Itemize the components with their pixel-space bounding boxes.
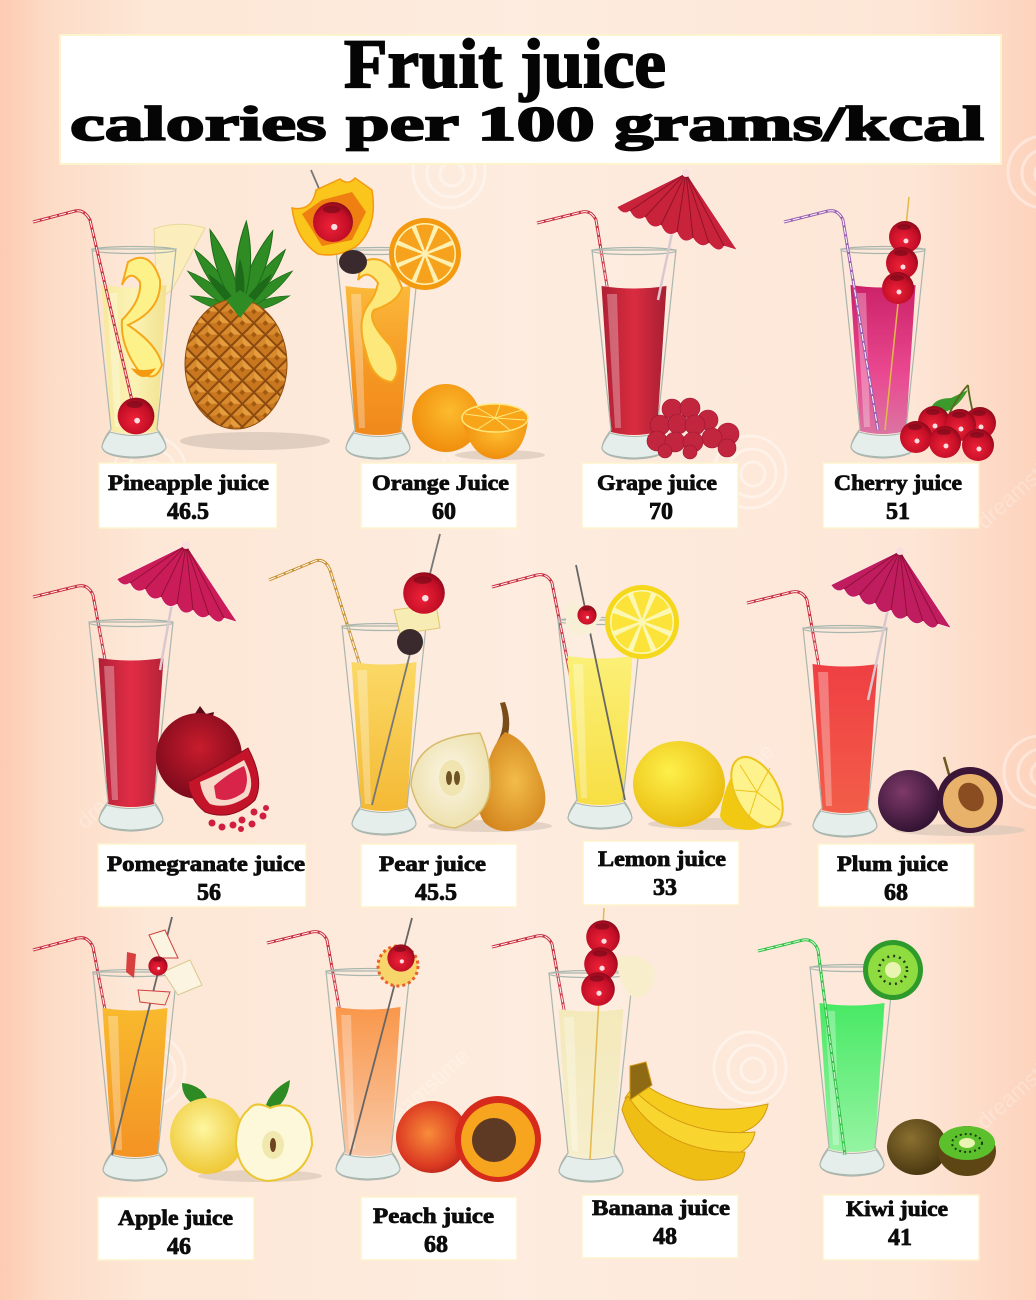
straw <box>492 575 595 800</box>
cherry garnish <box>566 565 625 800</box>
whole pear <box>477 702 545 831</box>
glass <box>89 620 173 831</box>
label: peach juice <box>361 1197 517 1260</box>
whole pomegranate <box>156 706 242 799</box>
label: cherry juice: Cherry juice <box>834 470 962 495</box>
umbrella <box>117 541 237 670</box>
label: pomegranate juice: 56 <box>197 880 221 906</box>
halved kiwi <box>938 1126 996 1176</box>
straw <box>269 560 360 665</box>
cherry skewer <box>350 918 418 1155</box>
halved plum <box>937 757 1003 833</box>
label: pomegranate juice <box>98 844 306 907</box>
umbrella <box>831 547 951 700</box>
label: banana juice: Banana juice <box>592 1195 730 1220</box>
label: orange juice <box>361 463 517 528</box>
drink: peach juice <box>267 918 541 1182</box>
drink: kiwi juice <box>758 940 996 1176</box>
glass <box>558 618 642 829</box>
watermark: dreamstime <box>72 738 174 834</box>
whole kiwi <box>887 1119 947 1175</box>
label: grape juice: Grape juice <box>597 470 717 495</box>
glass <box>592 248 676 459</box>
watermark: dreamstime <box>372 433 474 529</box>
peel spiral <box>122 258 162 376</box>
straw <box>33 211 133 405</box>
label: orange juice: 60 <box>432 499 456 525</box>
label: pineapple juice <box>99 463 277 528</box>
halved orange <box>462 404 528 459</box>
whole orange <box>412 384 480 452</box>
whole peach <box>396 1101 468 1173</box>
straw <box>747 592 820 672</box>
heading: Fruit juice: Fruit juice <box>344 26 666 103</box>
watermark: dreamstime <box>372 1043 474 1139</box>
cherry bunch <box>900 385 996 461</box>
glass <box>841 246 925 458</box>
kiwi slice <box>863 940 923 1000</box>
straw <box>492 936 565 1015</box>
label: apple juice <box>98 1197 254 1260</box>
label: pear juice <box>361 844 517 907</box>
label: grape juice: 70 <box>649 499 673 525</box>
cherries on a pick <box>581 908 655 1160</box>
label: peach juice: Peach juice <box>373 1203 494 1228</box>
drink: grape juice <box>537 169 739 459</box>
cut pomegranate <box>188 748 259 815</box>
label: lemon juice: 33 <box>653 875 677 901</box>
straw <box>784 211 878 430</box>
whole lemon <box>633 741 725 827</box>
drink: lemon juice <box>492 565 793 835</box>
watermark: dreamstime <box>677 738 779 834</box>
straw <box>33 586 106 665</box>
shadow <box>198 1170 322 1182</box>
label: lemon juice: Lemon juice <box>598 846 726 871</box>
drink: banana juice <box>492 908 768 1182</box>
subheading: calories per 100 grams/kcal <box>70 96 984 151</box>
glass <box>810 964 894 1176</box>
label: pear juice: Pear juice <box>379 851 486 876</box>
halved pear <box>411 733 490 828</box>
label: plum juice: Plum juice <box>837 851 948 876</box>
drink: apple juice <box>33 917 322 1182</box>
umbrella <box>617 169 737 300</box>
drink: orange juice <box>292 170 545 460</box>
apple garnish <box>112 917 202 1155</box>
shadow <box>180 432 330 450</box>
label: grape juice <box>582 463 738 528</box>
shadow <box>648 818 792 830</box>
shadow <box>455 450 545 460</box>
pineapple wedge <box>154 224 205 300</box>
label: apple juice: 46 <box>167 1234 191 1260</box>
shadow <box>428 820 552 832</box>
seeds <box>208 805 269 832</box>
label: kiwi juice: Kiwi juice <box>846 1196 948 1221</box>
cherries on a pick <box>882 197 921 430</box>
label: peach juice: 68 <box>424 1232 448 1258</box>
shadow <box>895 824 1025 836</box>
whole plum <box>878 770 940 832</box>
label: cherry juice: 51 <box>886 499 910 525</box>
halved lemon <box>720 749 793 835</box>
pineapple <box>184 221 296 429</box>
glass <box>549 970 633 1182</box>
label: banana juice <box>582 1195 738 1258</box>
cherry <box>118 398 154 434</box>
label: lemon juice <box>583 841 739 905</box>
orange garnish <box>292 170 373 274</box>
straw <box>758 940 845 1155</box>
drink: plum juice <box>747 547 1025 837</box>
orange slice <box>389 218 461 290</box>
drink: cherry juice <box>784 197 996 461</box>
glass <box>93 970 177 1181</box>
label: orange juice: Orange Juice <box>372 470 509 495</box>
label: pineapple juice: Pineapple juice <box>108 470 269 495</box>
glass <box>336 248 420 459</box>
title panel <box>60 26 1001 164</box>
halved peach <box>455 1096 541 1182</box>
label: pear juice: 45.5 <box>415 880 457 906</box>
label: plum juice: 68 <box>884 880 908 906</box>
label: kiwi juice: 41 <box>888 1225 912 1251</box>
glass <box>326 968 410 1180</box>
label: kiwi juice <box>823 1195 979 1260</box>
peel spiral <box>358 259 402 382</box>
glass <box>342 624 426 835</box>
bananas <box>622 1062 768 1180</box>
grapes <box>647 398 739 459</box>
label: pomegranate juice: Pomegranate juice <box>107 851 305 876</box>
label: pineapple juice: 46.5 <box>167 499 209 525</box>
label: cherry juice <box>823 463 979 528</box>
label: apple juice: Apple juice <box>118 1205 233 1230</box>
drink: pineapple juice <box>33 211 330 458</box>
glass <box>803 626 887 837</box>
watermark <box>72 136 1036 1139</box>
glass <box>92 246 176 458</box>
lemon slice <box>605 585 679 659</box>
whole apple <box>170 1083 244 1174</box>
straw <box>33 938 106 1015</box>
halved apple <box>236 1080 312 1181</box>
drink: pear juice <box>269 534 552 835</box>
straw <box>537 212 608 292</box>
straw <box>267 932 340 1012</box>
drink: pomegranate juice <box>33 541 269 832</box>
label: banana juice: 48 <box>653 1224 677 1250</box>
label: plum juice <box>818 844 974 907</box>
garnish skewer <box>372 534 445 805</box>
